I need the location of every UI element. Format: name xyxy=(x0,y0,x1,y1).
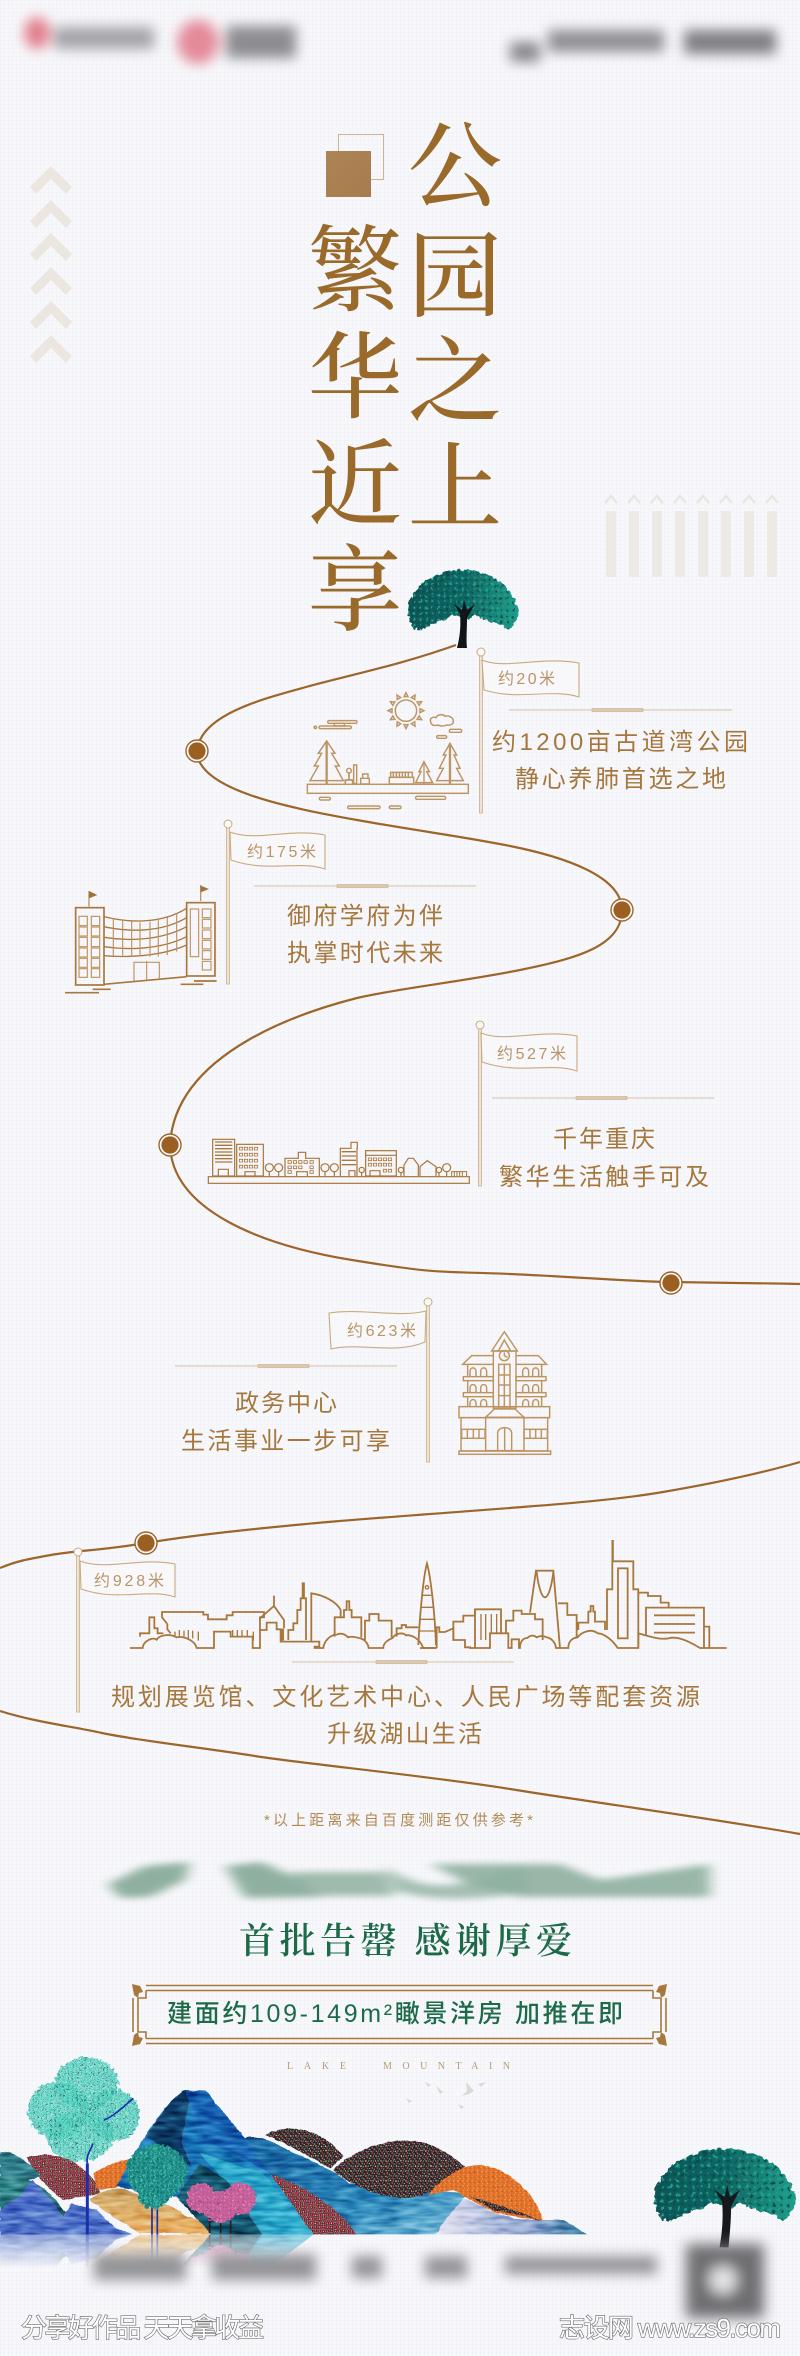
divider xyxy=(492,1096,714,1100)
text: city description xyxy=(499,1126,709,1191)
text: city description: 千年重庆 xyxy=(553,1126,655,1153)
flag: 约20米 xyxy=(477,648,579,813)
decorative bars with small chevrons, right xyxy=(605,496,778,577)
title: 公园之上 繁华近享: 园 xyxy=(408,201,502,336)
text: park description xyxy=(492,729,748,793)
text: facilities description xyxy=(111,1684,700,1748)
flag: 约175米: 约175米 xyxy=(247,843,316,861)
text: school description xyxy=(287,903,443,967)
large teal tree xyxy=(28,2057,139,2258)
flag: 约928米: 约928米 xyxy=(94,1572,164,1590)
divider xyxy=(292,1660,514,1664)
stop 5: cultural facilities xyxy=(74,1540,727,1748)
title: 公园之上 繁华近享: 上 xyxy=(408,412,502,547)
icon: clock tower hall xyxy=(459,1332,551,1454)
flag: 约527米: 约527米 xyxy=(497,1045,566,1063)
text: park description: 约1200亩古道湾公园 xyxy=(492,729,748,756)
text: government centre description: 生活事业一步可享 xyxy=(181,1428,390,1455)
route markers xyxy=(135,740,682,1554)
birds xyxy=(406,2082,486,2109)
footnote: *以上距离来自百度测距仅供参考* xyxy=(264,1812,533,1829)
mountain reflection xyxy=(0,2234,314,2266)
pink trees xyxy=(187,2182,256,2233)
icon: school building xyxy=(65,885,217,993)
stop 3: city xyxy=(208,1021,714,1191)
divider xyxy=(175,1364,397,1368)
stop 1: park xyxy=(307,648,748,813)
icon: city skyline xyxy=(130,1540,727,1648)
watermark text xyxy=(21,2313,781,2343)
winding route line xyxy=(0,645,800,1834)
stop 2: school xyxy=(65,820,476,993)
stop 4: government centre xyxy=(175,1298,551,1462)
illustration: painted mountains and trees xyxy=(0,2057,590,2260)
watermark text: 分享好作品 天天拿收益 xyxy=(21,2313,264,2343)
icon: tree, lower right xyxy=(654,2149,795,2247)
text: facilities description: 升级湖山生活 xyxy=(327,1721,482,1748)
divider xyxy=(254,884,476,888)
flag: 约175米 xyxy=(224,820,325,984)
icon: tree at start of route xyxy=(408,570,518,648)
title: 公园之上 繁华近享: 华 xyxy=(308,302,402,437)
title: 公园之上 繁华近享: 近 xyxy=(308,409,402,544)
watermark text: 志设网 www.zs9.com xyxy=(559,2313,781,2343)
icon: low city block xyxy=(208,1139,469,1183)
title ornament: squares xyxy=(326,134,384,197)
header: blurred logos and contact xyxy=(24,17,776,64)
caption: LAKE MOUNTAIN: MOUNTAIN xyxy=(383,2061,510,2072)
title: 公园之上 繁华近享 xyxy=(308,91,502,650)
banner text: 建面约109-149m²瞰景洋房 加推在即 xyxy=(167,2000,623,2028)
text: school description: 御府学府为伴 xyxy=(287,903,443,930)
text: school description: 执掌时代未来 xyxy=(287,940,443,967)
flag: 约623米 xyxy=(329,1298,432,1462)
text: government centre description: 政务中心 xyxy=(235,1390,337,1417)
flag: 约623米: 约623米 xyxy=(347,1322,416,1340)
title: 公园之上 繁华近享: 公 xyxy=(408,91,502,226)
footer: blurred contact and QR code xyxy=(94,2244,764,2318)
banner frame xyxy=(132,1984,667,2046)
caption: LAKE MOUNTAIN xyxy=(287,2061,510,2072)
text: facilities description: 规划展览馆、文化艺术中心、人民广场等配套资源 xyxy=(111,1684,700,1711)
divider xyxy=(509,708,732,712)
small teal tree xyxy=(126,2144,187,2260)
decorative chevrons, left xyxy=(30,166,72,363)
heading: 首批告罄 感谢厚爱: 首批告罄 感谢厚爱 xyxy=(239,1913,572,1964)
title: 公园之上 繁华近享: 之 xyxy=(408,306,502,441)
icon: park scene xyxy=(307,693,468,809)
mountains, right group xyxy=(245,2129,590,2237)
mountains, left group xyxy=(0,2090,315,2237)
blurred slogan xyxy=(108,1862,710,1899)
text: park description: 静心养肺首选之地 xyxy=(515,766,726,793)
title: 公园之上 繁华近享: 繁 xyxy=(308,195,402,330)
text: government centre description xyxy=(181,1390,390,1455)
text: city description: 繁华生活触手可及 xyxy=(499,1164,709,1191)
flag: 约20米: 约20米 xyxy=(498,670,555,688)
title: 公园之上 繁华近享: 享 xyxy=(308,515,402,650)
caption: LAKE MOUNTAIN: LAKE xyxy=(287,2061,346,2072)
flag: 约928米 xyxy=(74,1548,175,1712)
flag: 约527米 xyxy=(476,1021,577,1186)
